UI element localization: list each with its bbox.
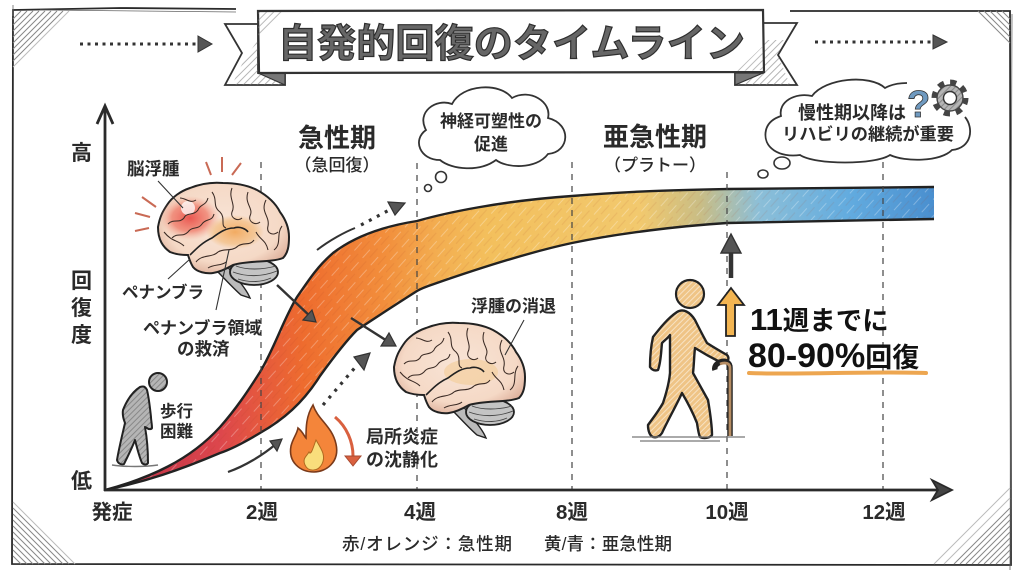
top left dotted arrow [80,36,212,52]
x axis labels [92,501,906,524]
cloud: rehabilitation continuation: リハビリの継続が重要 [782,124,954,144]
legend [342,534,672,554]
cloud: neuroplasticity: 神経可塑性の [440,112,542,131]
period divider lines [261,162,883,490]
cloud: rehabilitation continuation: 慢性期以降は [798,103,906,123]
y axis labels: 復 [71,297,92,320]
arrow: upper dotted trend [317,202,405,250]
heading: subacute phase: （プラトー） [604,156,706,175]
label: edema resolution: 浮腫の消退 [471,297,556,316]
legend: 黄/青：亜急性期 [544,534,672,554]
heading: acute phase [294,123,380,175]
arrow: dotted from flame [323,353,370,405]
icon: question mark: ? [907,84,930,126]
legend: 赤/オレンジ：急性期 [342,534,512,554]
x axis labels: 8週 [556,501,588,524]
label: penumbra rescue [143,318,262,359]
label: inflammation subsides: の沈静化 [366,450,438,470]
title text: 自発的回復のタイムライン [278,23,745,66]
x axis labels: 12週 [862,501,906,524]
icon: hunched walker [112,373,167,466]
title banner [225,10,797,85]
label: difficulty walking [160,402,194,441]
callout: 80-90 percent recovery by week 11 [748,302,926,375]
x axis labels: 発症 [92,501,132,524]
label: penumbra rescue: ペナンブラ領域 [143,318,262,338]
heading: subacute phase: 亜急性期 [603,122,707,152]
callout: 80-90 percent recovery by week 11: 80-90%回復 [748,337,919,375]
label: brain edema: 脳浮腫 [127,159,180,179]
heading: acute phase: （急回復） [294,156,380,175]
callout: 80-90 percent recovery by week 11: 11週までに [750,302,889,337]
y axis labels: 度 [71,324,92,347]
cloud: neuroplasticity: 促進 [474,135,508,154]
arrow: curved toward flame [228,439,282,472]
brain: recovered [394,323,525,438]
recovery curve band [105,187,934,490]
swelling rays [135,157,241,231]
arrow: inflammation falling [335,417,361,466]
icon: flame [291,405,337,472]
y axis labels: 回 [71,270,92,293]
label: difficulty walking: 歩行 [160,402,193,421]
y axis labels: 低 [71,470,92,493]
heading: acute phase: 急性期 [298,123,376,153]
axes [97,106,952,500]
icon: walker with cane [632,280,745,441]
label: penumbra rescue: の救済 [177,339,230,359]
arrow: dark recovery up [721,234,741,278]
y axis labels [71,142,92,493]
arrow: to recovered brain [351,318,396,346]
label: inflammation subsides: 局所炎症 [366,427,438,447]
arrow: orange recovery up [718,288,744,336]
x axis labels: 4週 [404,501,436,524]
brain: swollen with penumbra [158,183,289,298]
x axis labels: 10週 [705,501,749,524]
label: difficulty walking: 困難 [160,422,194,441]
cloud: neuroplasticity [419,87,565,192]
y axis labels: 高 [71,142,92,165]
top right dotted arrow [815,35,947,49]
x axis labels: 2週 [246,501,278,524]
cloud: rehabilitation continuation [758,80,970,178]
label: penumbra: ペナンブラ [122,282,204,302]
arrow: into band [277,285,316,322]
heading: subacute phase [603,122,707,175]
label: inflammation subsides [366,427,438,470]
callout lines [158,181,524,355]
icon: gear [935,83,965,113]
